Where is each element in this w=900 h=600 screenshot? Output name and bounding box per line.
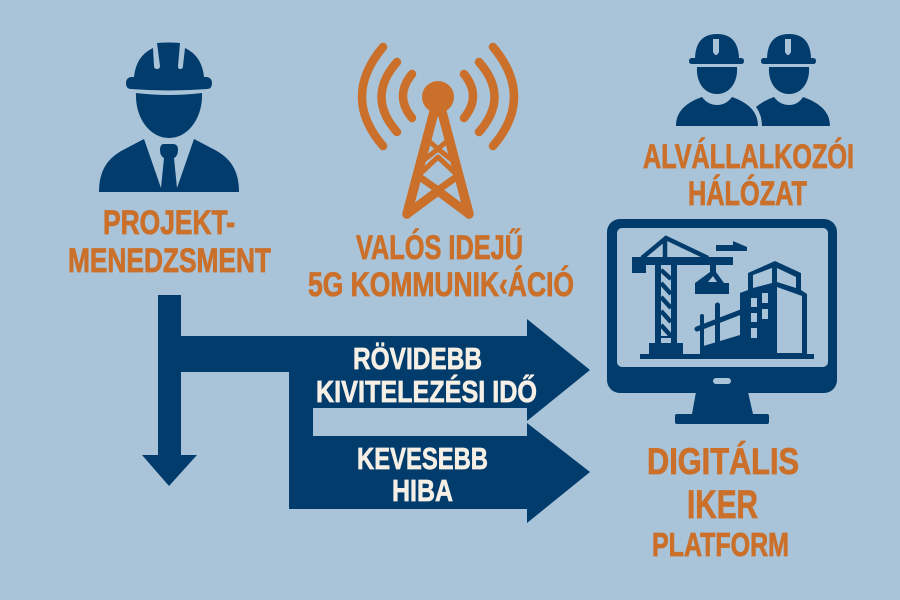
heading: valós idejű 5G kommunikáció: VALÓS IDEJŰ xyxy=(356,229,523,267)
heading: digitális iker platform: DIGITÁLIS xyxy=(647,441,799,482)
panel: 5G communication xyxy=(308,47,574,304)
text: rövidebb kivitelezési idő: KIVITELEZÉSI IDŐ xyxy=(316,373,537,409)
heading: digitális iker platform xyxy=(647,441,799,563)
heading: valós idejű 5G kommunikáció xyxy=(308,229,574,304)
panel: project management xyxy=(68,42,271,280)
icon: crane and building under construction xyxy=(632,238,814,359)
icon: manager with hard hat xyxy=(99,42,239,192)
text: rövidebb kivitelezési idő xyxy=(316,341,537,409)
arrow: branching flow arrows xyxy=(142,295,590,523)
heading: digitális iker platform: PLATFORM xyxy=(652,526,789,563)
text: rövidebb kivitelezési idő: RÖVIDEBB xyxy=(353,341,482,376)
text: kevesebb hiba xyxy=(357,441,488,508)
icon: 5G antenna tower xyxy=(362,47,514,214)
heading: alvállalkozói hálózat: HÁLÓZAT xyxy=(688,175,807,213)
heading: digitális iker platform: IKER xyxy=(687,483,758,527)
heading: alvállalkozói hálózat xyxy=(643,138,854,213)
heading: projekt-menedzsment: MENEDZSMENT xyxy=(68,242,271,280)
heading: valós idejű 5G kommunikáció: 5G KOMMUNIK‹ÁCIÓ xyxy=(308,266,574,304)
icon: two workers xyxy=(676,34,830,126)
text: kevesebb hiba: KEVESEBB xyxy=(357,441,488,476)
panel: digital twin platform xyxy=(607,219,837,563)
panel: subcontractor network xyxy=(643,34,854,213)
heading: projekt-menedzsment: PROJEKT- xyxy=(103,204,235,242)
heading: projekt-menedzsment xyxy=(68,204,271,280)
text: kevesebb hiba: HIBA xyxy=(392,473,453,508)
icon: monitor xyxy=(607,219,837,424)
